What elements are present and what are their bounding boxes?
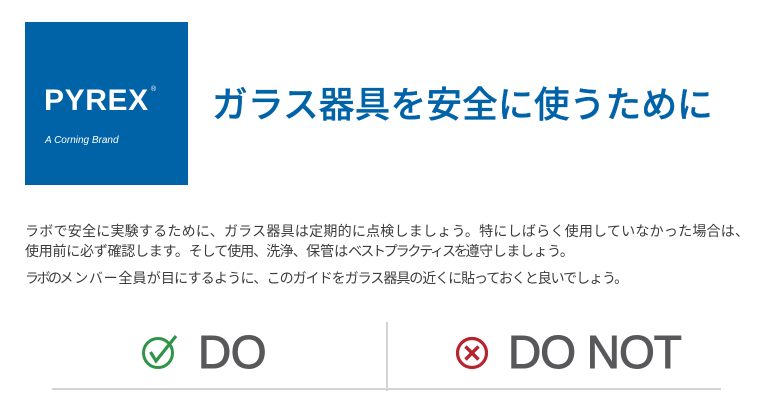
icon: green check [142, 335, 178, 369]
vertical divider [386, 322, 388, 391]
icon: red cross [456, 336, 488, 370]
title: ガラス器具を安全に使うために [212, 77, 713, 128]
logo registered mark: ® [151, 86, 156, 93]
intro text block [25, 221, 749, 288]
intro line 2: 使用前に必ず確認します。そして使用、洗浄、保管はベストプラクティスを遵守しましょう。 [25, 241, 574, 261]
intro line 3: ラボのメンバー全員が目にするように、このガイドをガラス器具の近くに貼っておくと良いでしょう。 [25, 268, 627, 288]
logo tagline: A Corning Brand [45, 135, 119, 146]
heading: DO: DO [198, 326, 266, 378]
panel: PYREX logo [25, 22, 188, 185]
horizontal divider [52, 388, 721, 390]
intro line 1: ラボで安全に実験するために、ガラス器具は定期的に点検しましょう。特にしばらく使用していなかった場合は、 [25, 221, 749, 241]
heading: DO NOT: DO NOT [508, 326, 681, 378]
logo wordmark: PYREX [44, 84, 149, 117]
